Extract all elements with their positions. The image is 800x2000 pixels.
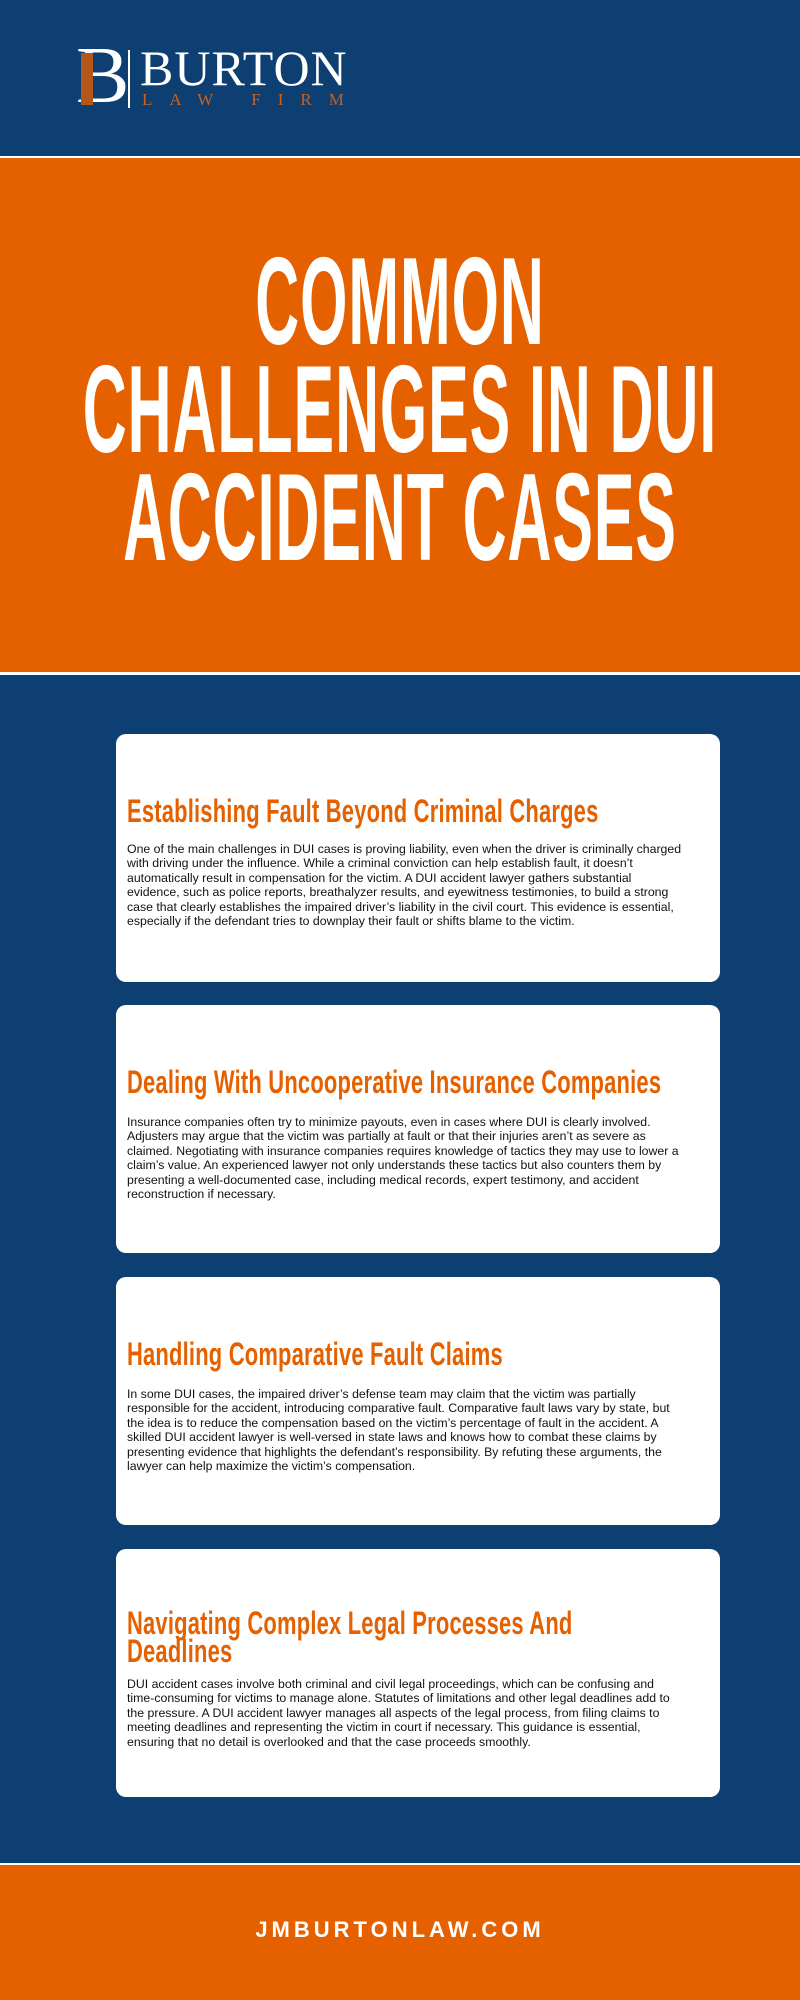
title: CHALLENGES IN DUI <box>83 341 717 479</box>
logo <box>76 32 361 120</box>
header band <box>0 0 800 156</box>
title band <box>0 158 800 672</box>
heading 4: Navigating Complex Legal Processes And Deadlines <box>127 1605 573 1669</box>
logo: LAW FIRM <box>142 90 361 109</box>
footer url: JMBURTONLAW.COM <box>255 1917 545 1942</box>
footer band <box>0 1865 800 2000</box>
body 4: DUI accident cases involve both criminal and civil legal proceedings, which can be confusing and time-consuming for victims to manage alone. Statutes of limitations and other legal deadlines add to the pressure. A DUI accident lawyer manages all aspects of the legal process, from filing claims to meeting deadlines and representing the victim in court if necessary. This guidance is essential, ensuring that no detail is overlooked and that the case proceeds smoothly. <box>127 1677 670 1749</box>
logo text: BURTON <box>140 40 348 96</box>
heading 1: Establishing Fault Beyond Criminal Charges <box>127 793 598 829</box>
title: COMMON <box>255 233 545 371</box>
body 3: In some DUI cases, the impaired driver’s defense team may claim that the victim was partially responsible for the accident, introducing comparative fault. Comparative fault laws vary by state, but the idea is to reduce the compensation based on the victim’s percentage of fault in the accident. A skilled DUI accident lawyer is well-versed in state laws and knows how to combat these claims by presenting evidence that highlights the defendant’s responsibility. By refuting these arguments, the lawyer can help maximize the victim’s compensation. <box>127 1387 670 1473</box>
body 1: One of the main challenges in DUI cases is proving liability, even when the driver is criminally charged with driving under the influence. While a criminal conviction can help establish fault, it doesn’t automatically result in compensation for the victim. A DUI accident lawyer gathers substantial evidence, such as police reports, breathalyzer results, and eyewitness testimonies, to build a strong case that clearly establishes the impaired driver’s liability in the civil court. This evidence is essential, especially if the defendant tries to downplay their fault or shifts blame to the victim. <box>127 842 681 928</box>
heading 2: Dealing With Uncooperative Insurance Companies <box>127 1064 661 1100</box>
logo mark: B with pillar: B <box>76 32 129 120</box>
card 2 <box>116 1005 720 1253</box>
body 2: Insurance companies often try to minimize payouts, even in cases where DUI is clearly involved. Adjusters may argue that the victim was partially at fault or that their injuries aren’t as severe as claimed. Negotiating with insurance companies requires knowledge of tactics they may use to lower a claim’s value. An experienced lawyer not only understands these tactics but also counters them by presenting a well-documented case, including medical records, expert testimony, and accident reconstruction if necessary. <box>127 1115 679 1201</box>
card 1 <box>116 734 720 982</box>
title <box>83 233 717 587</box>
card 3 <box>116 1277 720 1525</box>
title: ACCIDENT CASES <box>123 449 677 587</box>
heading 3: Handling Comparative Fault Claims <box>127 1336 503 1372</box>
card 4 <box>116 1549 720 1797</box>
